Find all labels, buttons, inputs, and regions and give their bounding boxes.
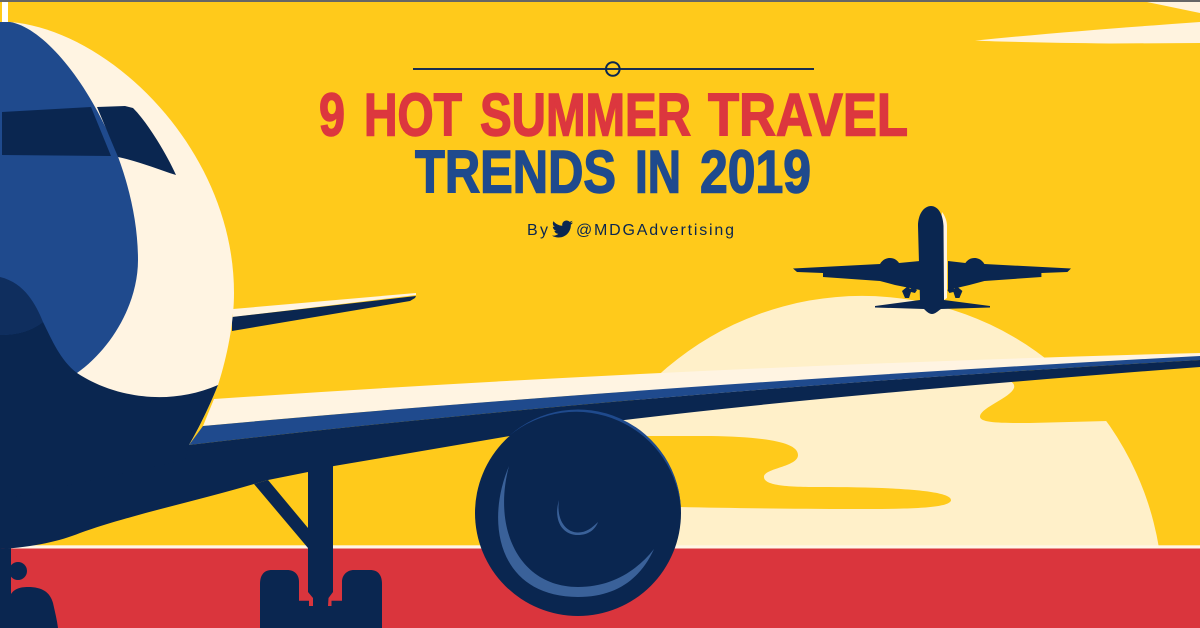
- title line 2: [415, 138, 811, 206]
- cockpit window left: [2, 107, 111, 156]
- title line 2: 2019: [700, 138, 811, 206]
- title line 1: HOT: [364, 80, 462, 148]
- byline: @MDGAdvertising: [576, 222, 734, 239]
- cockpit window right: [97, 106, 176, 175]
- title line 1: SUMMER: [480, 80, 691, 148]
- title line 1: [319, 80, 908, 148]
- sun with cloud bands: [500, 296, 1200, 548]
- clouds: top right: [975, 2, 1200, 44]
- landing gear: [254, 460, 382, 628]
- title: [319, 80, 908, 206]
- title line 2: TRENDS: [415, 138, 616, 206]
- divider with ring: [413, 62, 814, 76]
- icon: twitter bird: [552, 220, 573, 238]
- byline: By: [527, 222, 548, 239]
- ground: [0, 545, 1200, 628]
- near wing: [0, 353, 1200, 549]
- small airplane silhouette: [793, 206, 1071, 314]
- left ground shapes: [0, 548, 58, 628]
- airplane nose: [0, 22, 234, 500]
- title line 1: 9: [319, 80, 345, 148]
- far wing: [232, 293, 416, 331]
- engine: [475, 409, 681, 616]
- title line 1: TRAVEL: [708, 80, 908, 148]
- title line 2: IN: [635, 138, 681, 206]
